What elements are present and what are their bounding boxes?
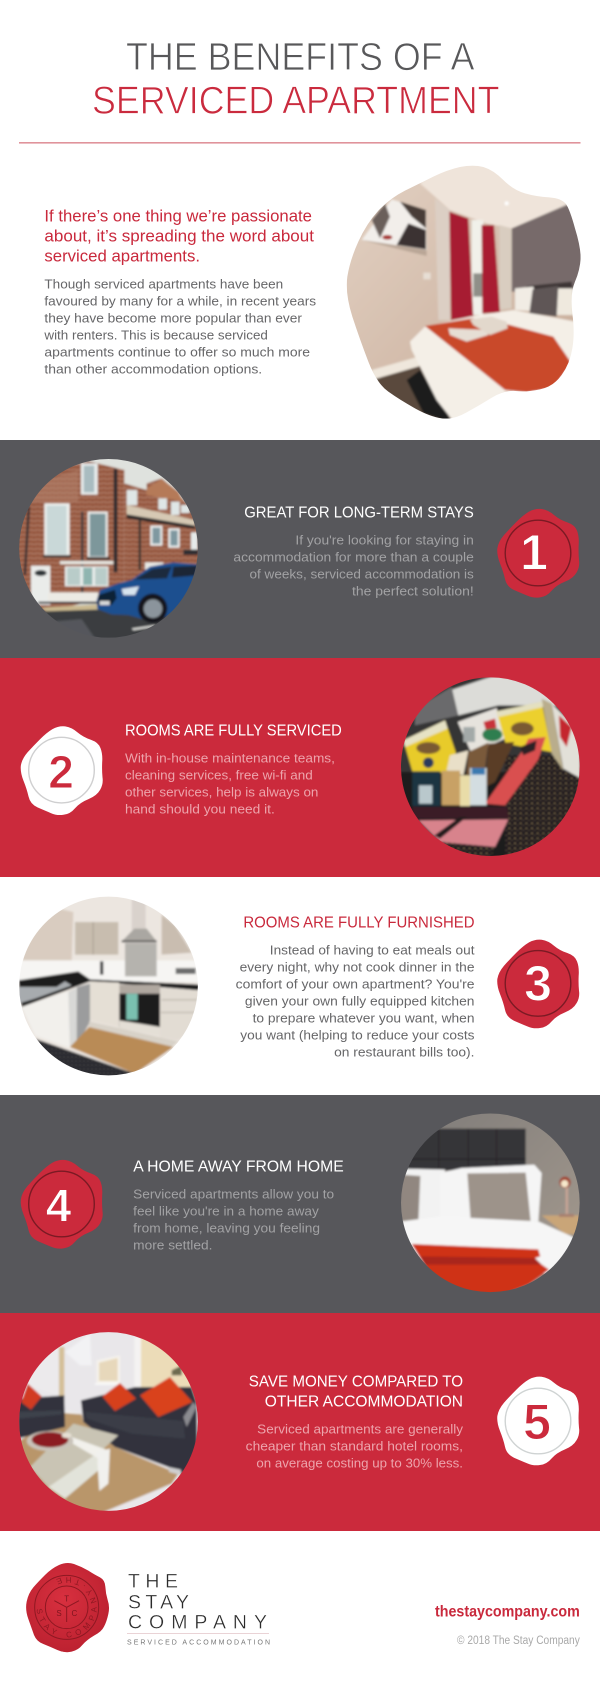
- body text: the perfect solution!: [352, 584, 474, 599]
- intro heading: [44, 208, 314, 266]
- photo: brick building with blue car: [19, 459, 198, 638]
- body text: on average costing up to 30% less.: [256, 1456, 463, 1471]
- body text: on restaurant bills too).: [334, 1045, 474, 1060]
- body text: Serviced apartments are generally: [257, 1422, 464, 1437]
- heading: OTHER ACCOMMODATION: [265, 1394, 463, 1411]
- panel: benefit 4: [0, 1095, 600, 1313]
- panel: benefit 1: [0, 440, 600, 658]
- body text: With in-house maintenance teams,: [125, 751, 335, 766]
- body text: Serviced apartments allow you to: [133, 1187, 334, 1202]
- intro body text: with renters. This is because serviced: [43, 328, 268, 343]
- body text: to prepare whatever you want, when: [253, 1011, 474, 1026]
- body text: from home, leaving you feeling: [133, 1221, 320, 1236]
- panel: benefit 3: [19, 896, 580, 1076]
- photo: snack boxes: [401, 677, 580, 856]
- footer logo: [26, 1563, 270, 1652]
- intro body text: they have become more popular than ever: [44, 311, 303, 326]
- logo: wordmark: [128, 1571, 267, 1633]
- photo: bedroom blob: [340, 160, 585, 425]
- website link: thestaycompany.com: [435, 1604, 580, 1621]
- body text: If you're looking for staying in: [295, 533, 474, 548]
- body text: feel like you're in a home away: [133, 1204, 319, 1219]
- number seal 4: [21, 1160, 103, 1249]
- body text: [233, 533, 474, 599]
- heading: A HOME AWAY FROM HOME: [133, 1159, 344, 1176]
- number seal 1: 1: [520, 524, 548, 580]
- body text: Instead of having to eat meals out: [270, 943, 475, 958]
- title: THE BENEFITS OF A: [126, 36, 474, 79]
- body text: cleaning services, free wi-fi and: [125, 768, 313, 783]
- photo: bed with red throw: [401, 1114, 580, 1292]
- body text: you want (helping to reduce your costs: [240, 1028, 475, 1043]
- title: SERVICED APARTMENT: [92, 79, 500, 122]
- body text: accommodation for more than a couple: [233, 550, 474, 565]
- body text: [133, 1187, 334, 1253]
- logo: wax seal: S: [56, 1609, 62, 1618]
- body text: [125, 751, 335, 817]
- number seal 2: [21, 726, 103, 815]
- body text: hand should you need it.: [125, 802, 275, 817]
- number seal 2: 2: [48, 746, 74, 798]
- number seal 5: 5: [523, 1394, 551, 1450]
- number seal 3: [497, 940, 579, 1028]
- logo: wax seal: STAY COMPANY·THE: [36, 1577, 97, 1638]
- heading: GREAT FOR LONG-TERM STAYS: [244, 505, 474, 522]
- title: [92, 36, 500, 122]
- copyright: © 2018 The Stay Company: [457, 1635, 580, 1647]
- photo: living room sofa: [19, 1332, 198, 1511]
- body text: of weeks, serviced accommodation is: [250, 567, 474, 582]
- intro body text: apartments continue to offer so much more: [44, 345, 310, 360]
- intro body text: [43, 277, 317, 377]
- heading: SAVE MONEY COMPARED TO: [249, 1374, 463, 1391]
- heading: ROOMS ARE FULLY SERVICED: [125, 723, 342, 740]
- heading: [249, 1374, 463, 1411]
- body text: every night, why not cook dinner in the: [240, 960, 474, 975]
- logo: wax seal: T: [64, 1595, 69, 1604]
- intro heading: If there’s one thing we’re passionate: [44, 208, 312, 226]
- panel: benefit 2: [0, 658, 600, 877]
- intro heading: serviced apartments.: [44, 248, 200, 266]
- body text: more settled.: [133, 1238, 212, 1253]
- body text: [236, 943, 475, 1060]
- logo: wordmark: STAY: [128, 1591, 189, 1613]
- number seal 5: [497, 1377, 579, 1465]
- panel: benefit 5: [0, 1313, 600, 1531]
- body text: other services, help is always on: [125, 785, 318, 800]
- photo: kitchen: [19, 896, 198, 1076]
- heading: ROOMS ARE FULLY FURNISHED: [243, 915, 474, 932]
- body text: comfort of your own apartment? You're: [236, 977, 474, 992]
- number seal 3: 3: [524, 956, 552, 1012]
- body text: cheaper than standard hotel rooms,: [246, 1439, 463, 1454]
- number seal 1: [497, 509, 579, 598]
- body text: [246, 1422, 464, 1471]
- logo: wordmark: THE: [128, 1571, 178, 1593]
- intro heading: about, it’s spreading the word about: [44, 228, 314, 246]
- logo: wax seal: [26, 1563, 109, 1652]
- logo: wordmark: COMPANY: [128, 1611, 267, 1633]
- intro body text: favoured by many for a while, in recent years: [44, 294, 317, 309]
- panel: intro: [43, 160, 585, 425]
- number seal 4: 4: [46, 1180, 72, 1232]
- intro body text: Though serviced apartments have been: [44, 277, 283, 292]
- logo: wax seal: C: [71, 1609, 77, 1618]
- intro body text: than other accommodation options.: [44, 362, 262, 377]
- body text: given your own fully equipped kitchen: [245, 994, 474, 1009]
- logo: tagline: SERVICED ACCOMMODATION: [127, 1639, 270, 1646]
